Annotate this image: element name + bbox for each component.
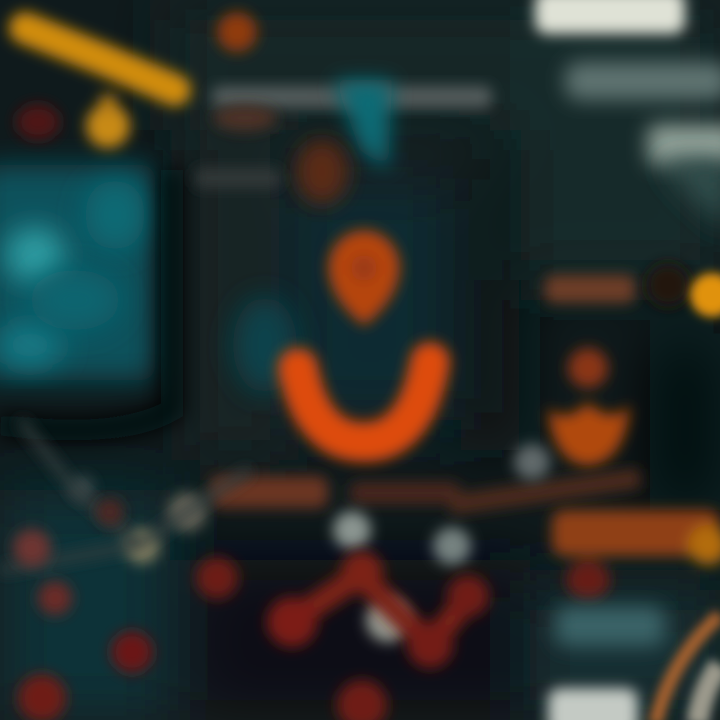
pale panel right <box>648 125 720 230</box>
icon: yellow dot at edge <box>646 263 720 317</box>
small orange blob <box>296 140 348 204</box>
chart: red line graph <box>196 551 489 720</box>
heading: grey text band <box>212 86 492 108</box>
teal accent <box>335 80 392 170</box>
chart: orange arc gauge <box>298 362 430 442</box>
panel: teal screen <box>0 165 172 430</box>
arrow: orange diagonal <box>655 615 720 720</box>
icon: orange dot <box>217 12 257 52</box>
red data dots left <box>13 498 153 720</box>
white panel top right <box>535 0 685 34</box>
icon: orange pin <box>328 230 400 326</box>
grey panel right <box>565 62 720 100</box>
label: orange heading right <box>545 275 635 303</box>
icon: dark red dot <box>16 104 60 140</box>
network lines: grey left <box>0 420 250 570</box>
white panel bottom right <box>548 688 638 720</box>
network nodes: pale <box>70 444 550 642</box>
teal panel bottom right <box>555 606 665 646</box>
panel: orange bar right <box>552 510 720 600</box>
chart: brown connector band <box>210 476 640 508</box>
heading: yellow banner <box>25 28 175 148</box>
small grey text <box>195 168 280 188</box>
icon: orange figure <box>548 348 630 466</box>
small brown label <box>213 105 277 131</box>
teal side glow <box>233 297 297 393</box>
